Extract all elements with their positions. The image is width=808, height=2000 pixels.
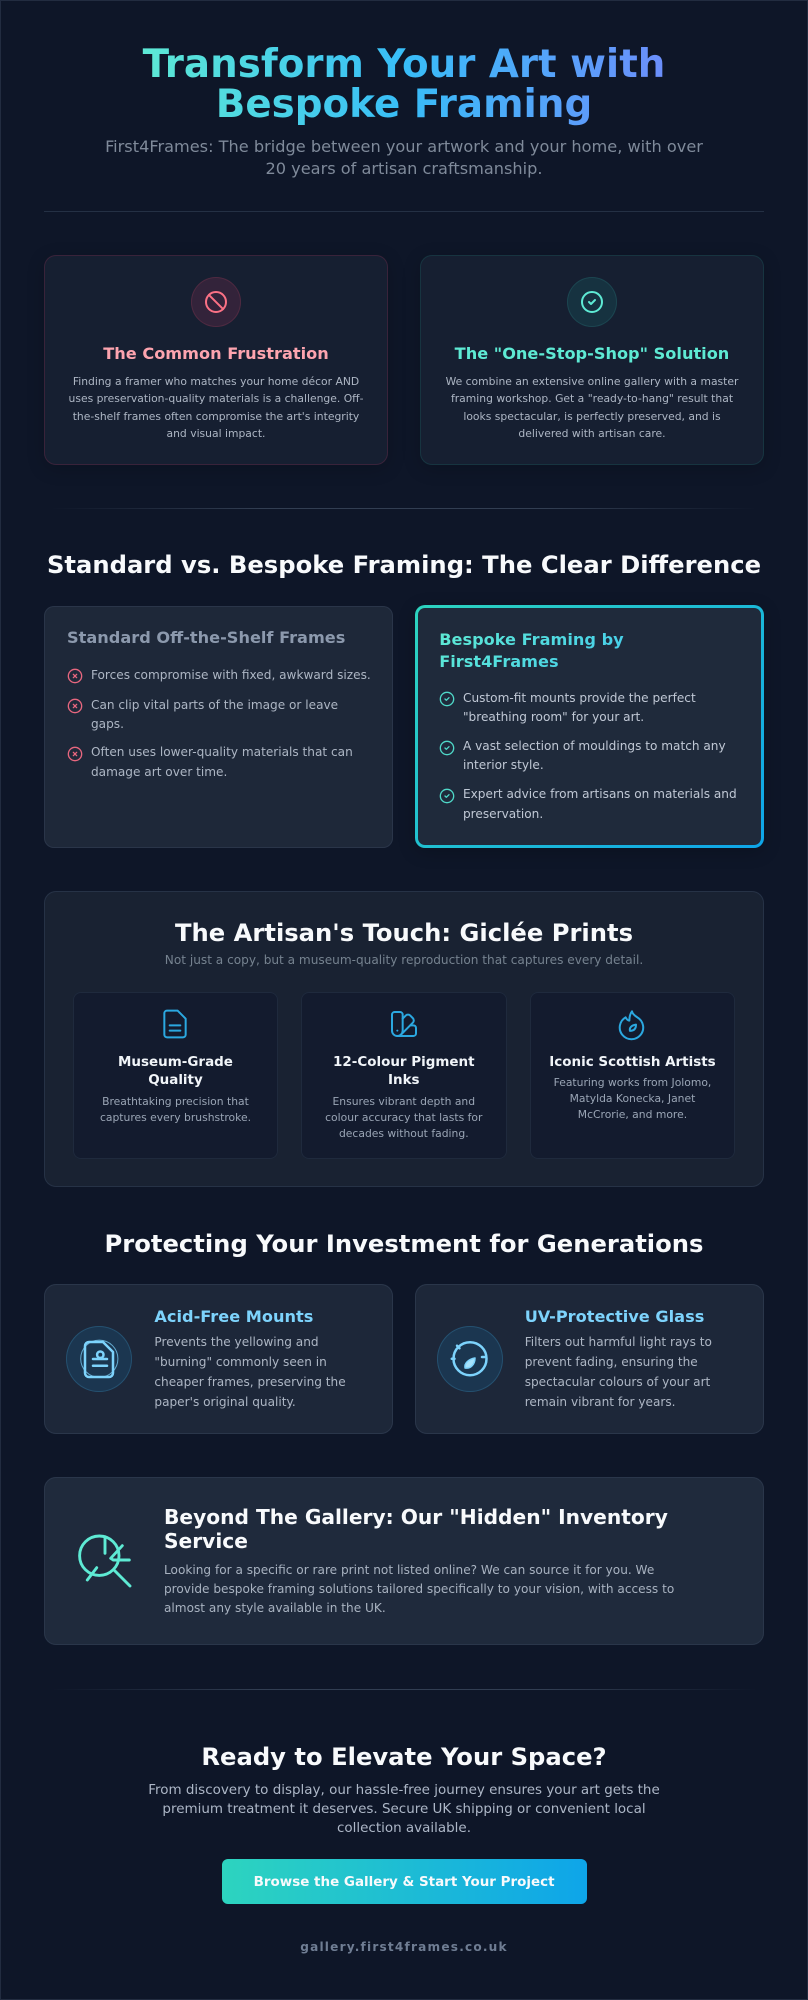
icon: document	[163, 1010, 187, 1038]
icon: uv glass	[437, 1326, 503, 1392]
icon: check circle	[567, 277, 617, 327]
title: Transform Your Art with	[143, 42, 665, 87]
title	[136, 45, 672, 126]
icon: search clock	[78, 1534, 132, 1588]
text: acid-free body	[154, 1335, 346, 1409]
card: scottish artists	[530, 992, 735, 1159]
text: solution body: We combine an extensive online gallery with a master	[446, 375, 738, 388]
panel: hidden inventory service	[44, 1477, 764, 1645]
text: uv body: spectacular colours of your art	[525, 1375, 710, 1389]
title: Bespoke Framing	[216, 82, 592, 127]
text: acid-free body: Prevents the yellowing and	[154, 1335, 319, 1349]
heading: bespoke	[439, 629, 739, 673]
panel: acid-free mounts	[44, 1284, 393, 1434]
heading: museum-grade: Museum-Grade	[118, 1054, 233, 1070]
icon: acid-free document	[66, 1326, 132, 1392]
text: hidden inventory body: Looking for a specific or rare print not listed online? We can source it for you. We	[164, 1563, 654, 1577]
list item: mounts	[440, 691, 696, 724]
heading: scottish artists: Iconic Scottish Artists	[549, 1054, 716, 1070]
heading: bespoke: Bespoke Framing by	[439, 630, 624, 649]
subtitle: First4Frames: The bridge between your artwork and your home, with over	[105, 137, 703, 156]
text: museum-grade body: captures every brushstroke.	[100, 1111, 251, 1124]
heading: beyond the gallery: Service	[164, 1529, 248, 1553]
heading: beyond the gallery	[164, 1504, 668, 1553]
panel: giclee prints	[44, 891, 764, 1187]
text: solution body: framing workshop. Get a "ready-to-hang" result that	[451, 392, 733, 405]
panel: bespoke framing	[415, 605, 764, 848]
text: hidden inventory body: almost any style available in the UK.	[164, 1601, 386, 1615]
text: hidden inventory body: provide bespoke framing solutions tailored specifically to your vision, with access to	[164, 1582, 674, 1596]
list item: mounts: Custom-fit mounts provide the perfect	[463, 691, 696, 705]
panel: uv-protective glass	[415, 1284, 764, 1434]
list item: clipping	[68, 698, 338, 731]
text: solution body: looks spectacular, is perfectly preserved, and is	[463, 410, 721, 422]
heading: pigment inks: 12-Colour Pigment	[333, 1054, 475, 1070]
panel: common frustration	[44, 255, 388, 465]
list item: materials: damage art over time.	[91, 765, 227, 779]
heading: standard vs bespoke: Standard vs. Bespoke Framing: The Clear Difference	[47, 550, 761, 579]
text: giclee subtitle: Not just a copy, but a museum-quality reproduction that captures every detail.	[165, 953, 643, 967]
text: solution body	[446, 375, 738, 440]
text: hidden inventory body	[164, 1563, 674, 1615]
text: cta body	[148, 1782, 660, 1836]
text: pigment inks body: Ensures vibrant depth and	[332, 1095, 475, 1108]
text: frustration body	[69, 375, 363, 440]
list item: materials: Often uses lower-quality materials that can	[91, 745, 353, 759]
panel: standard frames	[44, 606, 393, 848]
subtitle: 20 years of artisan craftsmanship.	[265, 158, 543, 178]
footer url: gallery.first4frames.co.uk	[300, 1940, 508, 1954]
text: uv body: remain vibrant for years.	[525, 1395, 676, 1409]
list item: sizes: Forces compromise with fixed, awkward sizes.	[91, 668, 371, 682]
text: cta body: From discovery to display, our hassle-free journey ensures your art gets the	[148, 1782, 660, 1798]
heading: pigment inks	[333, 1054, 475, 1088]
text: uv body: Filters out harmful light rays to	[525, 1335, 712, 1349]
button: browse the gallery: Browse the Gallery & Start Your Project	[254, 1874, 555, 1890]
text: scottish artists body	[554, 1076, 711, 1121]
text: pigment inks body	[325, 1095, 482, 1140]
heading: uv-protective glass: UV-Protective Glass	[525, 1307, 704, 1326]
heading: one-stop-shop: The "One-Stop-Shop" Solution	[455, 344, 729, 363]
text: cta body: premium treatment it deserves. Secure UK shipping or convenient local	[162, 1800, 646, 1816]
list item: clipping: gaps.	[91, 717, 124, 731]
text: frustration body: the-shelf frames often compromise the art's integrity	[73, 410, 359, 422]
text: frustration body: and visual impact.	[167, 427, 265, 440]
panel: one-stop-shop solution	[420, 255, 764, 465]
card: museum-grade	[73, 992, 278, 1159]
icon: ban	[191, 277, 241, 327]
heading: standard: Standard Off-the-Shelf Frames	[67, 628, 345, 647]
text: solution body: delivered with artisan care.	[518, 427, 666, 440]
text: frustration body: Finding a framer who matches your home décor AND	[73, 375, 359, 388]
list item: advice: preservation.	[463, 807, 543, 821]
text: scottish artists body: McCrorie, and more.	[578, 1108, 687, 1121]
button: browse the gallery	[222, 1859, 587, 1904]
heading: ready to elevate: Ready to Elevate Your Space?	[201, 1742, 607, 1771]
icon: flame	[618, 1010, 644, 1040]
list item: mouldings	[440, 739, 726, 772]
text: pigment inks body: decades without fading.	[339, 1127, 469, 1140]
text: frustration body: uses preservation-quality materials is a challenge. Off-	[69, 392, 363, 405]
card: pigment inks	[301, 992, 507, 1159]
heading: beyond the gallery: Beyond The Gallery: Our "Hidden" Inventory	[164, 1504, 668, 1528]
heading: the common frustration: The Common Frustration	[103, 344, 329, 363]
list item: materials	[68, 745, 353, 779]
heading: pigment inks: Inks	[388, 1072, 420, 1088]
text: uv body	[525, 1335, 712, 1409]
list item: mouldings: interior style.	[463, 758, 544, 772]
heading: museum-grade: Quality	[148, 1072, 203, 1088]
text: cta body: collection available.	[337, 1820, 471, 1836]
text: museum-grade body: Breathtaking precision that	[102, 1095, 249, 1108]
text: uv body: prevent fading, ensuring the	[525, 1355, 698, 1369]
subtitle	[105, 137, 703, 178]
list item: mouldings: A vast selection of mouldings to match any	[463, 739, 726, 753]
heading: acid-free mounts: Acid-Free Mounts	[154, 1307, 313, 1326]
heading: bespoke: First4Frames	[439, 652, 559, 671]
text: acid-free body: paper's original quality.	[154, 1395, 296, 1409]
text: scottish artists body: Featuring works from Jolomo,	[554, 1076, 711, 1089]
text: acid-free body: cheaper frames, preserving the	[154, 1375, 346, 1389]
heading: protecting your investment: Protecting Your Investment for Generations	[105, 1229, 703, 1258]
text: scottish artists body: Matylda Konecka, Janet	[570, 1092, 695, 1105]
heading: museum-grade	[118, 1054, 233, 1088]
text: acid-free body: "burning" commonly seen in	[154, 1355, 327, 1369]
list item: mounts: "breathing room" for your art.	[463, 710, 644, 724]
icon: swatch book	[391, 1011, 417, 1037]
list item: advice: Expert advice from artisans on materials and	[463, 787, 737, 801]
list item: advice	[440, 787, 737, 821]
text: museum-grade body	[100, 1095, 251, 1124]
heading: artisan's touch: The Artisan's Touch: Giclée Prints	[175, 918, 633, 947]
list item: clipping: Can clip vital parts of the image or leave	[91, 698, 338, 712]
text: pigment inks body: colour accuracy that lasts for	[325, 1111, 482, 1124]
